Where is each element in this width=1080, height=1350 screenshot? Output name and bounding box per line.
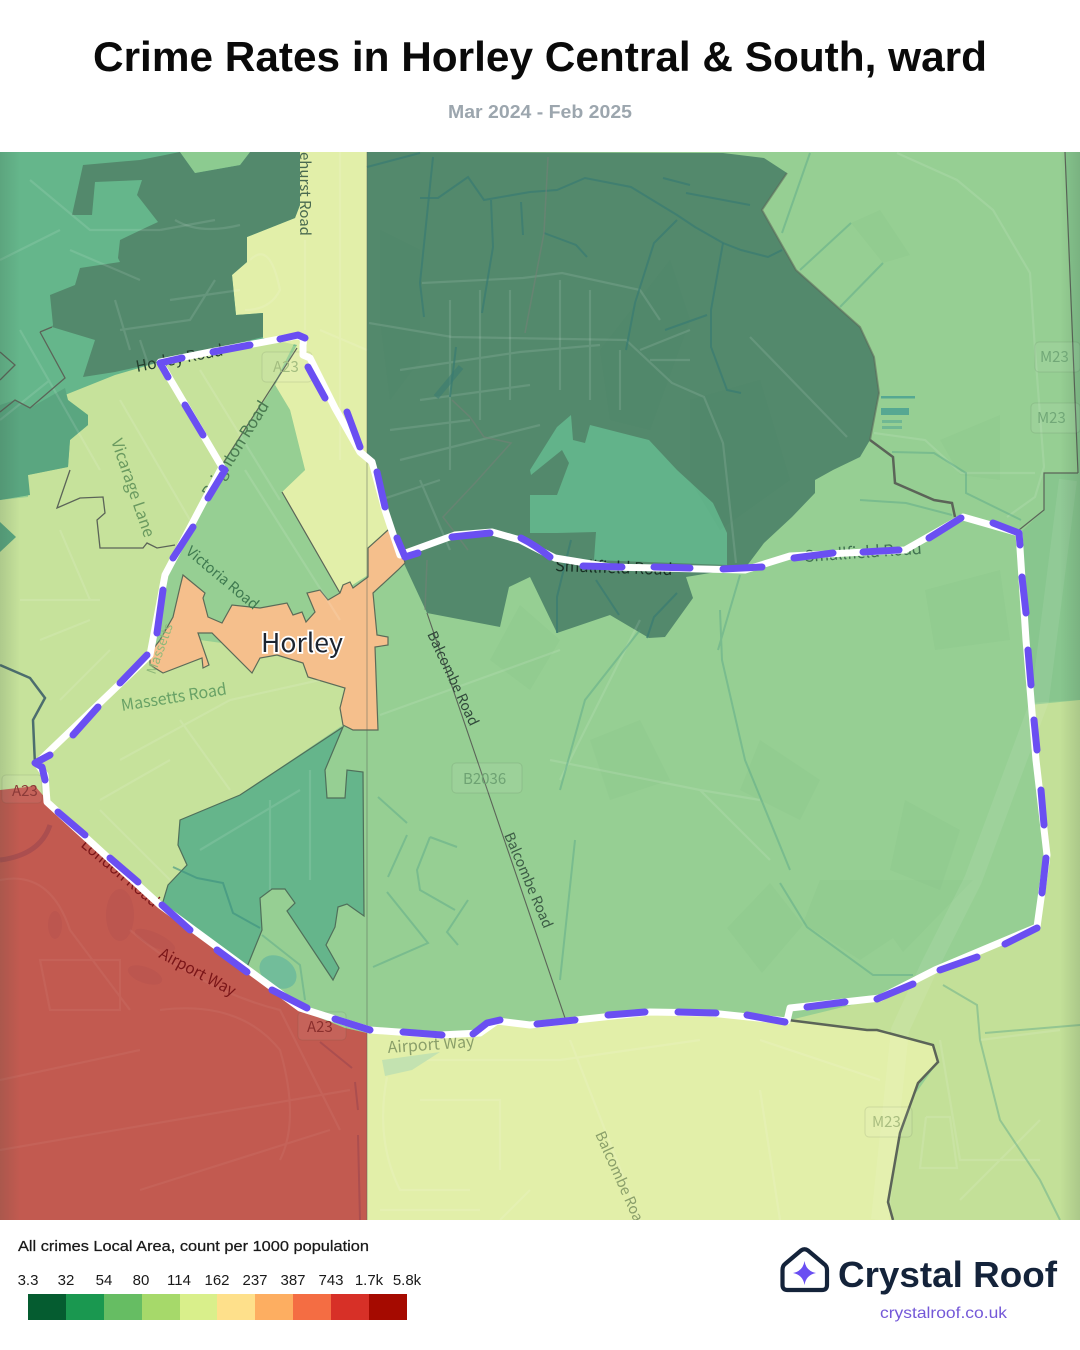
- legend tick labels: [18, 1272, 422, 1289]
- legend tick labels: 743: [318, 1272, 344, 1289]
- area: north yellow corridor: [232, 152, 400, 593]
- map edge shading right: [1067, 152, 1080, 1220]
- map labels: Airport Way: [156, 942, 240, 1001]
- place label: Horley: Horley: [261, 623, 343, 660]
- area: north-west dark green: [50, 152, 300, 377]
- map labels: M23: [1040, 346, 1069, 367]
- legend tick labels: 1.7k: [355, 1272, 384, 1289]
- airport roads: [0, 879, 350, 1190]
- area: Brighton Road mid green: [275, 385, 305, 492]
- website url: crystalroof.co.uk: [880, 1305, 1008, 1322]
- map labels: Brighton Road: [195, 395, 274, 502]
- legend tick labels: 162: [204, 1272, 230, 1289]
- stream in south central area: [173, 867, 260, 928]
- legend tick labels: 3.3: [18, 1272, 38, 1289]
- legend tick labels: 54: [96, 1272, 112, 1289]
- map labels: Massetts: [141, 620, 177, 676]
- streams in green areas: [373, 153, 1080, 1220]
- map labels: Smallfield Road: [804, 535, 922, 567]
- area: base mid green: [1, 152, 1080, 1094]
- area: Smallfield medium green island: [530, 415, 727, 565]
- title: Crime Rates in Horley Central & South, ward: [93, 33, 987, 80]
- field patches: [380, 210, 1010, 973]
- map labels: Victoria Road: [182, 541, 264, 614]
- pond: [260, 955, 296, 989]
- map labels: A23: [273, 356, 299, 377]
- area: top pocket green: [180, 152, 250, 173]
- airport dark shapes: [48, 889, 178, 989]
- map labels: M23: [1037, 407, 1066, 428]
- ward boundary: purple dashes: [35, 335, 1046, 1035]
- map labels: A23: [12, 780, 38, 801]
- area: Horley town centre orange: [150, 530, 405, 730]
- legend tick labels: 114: [167, 1272, 191, 1289]
- map labels: Horley Road: [134, 338, 225, 377]
- map labels: Balcombe Road: [499, 829, 558, 931]
- local area boundary lines: [0, 152, 1078, 1220]
- area: south-east light green: [790, 700, 1080, 1220]
- area: airport south yellow: [367, 1012, 938, 1220]
- wordmark: Crystal Roof: [838, 1254, 1058, 1295]
- legend tick labels: 80: [133, 1272, 149, 1289]
- logo: Crystal Roof: [782, 1249, 1058, 1322]
- legend tick labels: 32: [58, 1272, 74, 1289]
- map labels: Vicarage Lane: [106, 435, 163, 540]
- area: far-west darker green: [0, 388, 88, 500]
- icon: house with star: [782, 1249, 827, 1290]
- map labels: Massetts Road: [119, 676, 228, 716]
- airport lake: [382, 1052, 440, 1076]
- map edge shading left: [0, 152, 14, 1220]
- area: east strip green: [1020, 152, 1080, 703]
- faint road network: [0, 152, 1060, 1220]
- area: north-west medium green: [0, 152, 300, 500]
- area: south central medium green: [162, 727, 364, 980]
- rivers and streams in dark area: [367, 153, 782, 638]
- map labels: London Road: [77, 833, 165, 912]
- map labels: Smallfield Road: [555, 552, 673, 580]
- legend tick labels: 387: [280, 1272, 306, 1289]
- area: Gatwick airport red: [0, 786, 367, 1220]
- area: west light green: [0, 338, 345, 908]
- legend tick labels: 237: [242, 1272, 268, 1289]
- map labels: Airport Way: [387, 1028, 476, 1058]
- legend title: All crimes Local Area, count per 1000 population: [18, 1239, 369, 1255]
- legend colour scale: [28, 1294, 407, 1320]
- stream by pond: [262, 935, 305, 1000]
- map labels: [12, 152, 1069, 1233]
- area: north-east dark green: [367, 152, 879, 638]
- map labels: B2036: [463, 768, 506, 789]
- river Mole west: [0, 665, 45, 765]
- map labels: ehurst Road: [295, 152, 316, 236]
- map labels: A23: [307, 1016, 333, 1037]
- map labels: M23: [872, 1111, 901, 1132]
- legend tick labels: 5.8k: [393, 1272, 422, 1289]
- ward boundary: white underlay: [37, 336, 1047, 1035]
- grey footpath in dark area: [425, 157, 548, 610]
- motorway band: [1034, 479, 1072, 702]
- sewage works: [881, 396, 915, 429]
- legend: [18, 1239, 422, 1320]
- airport dark patches: [0, 825, 360, 1220]
- map labels: Balcombe Road: [590, 1127, 653, 1233]
- area: west edge dark pocket: [0, 522, 16, 552]
- road shields: [2, 342, 1080, 1137]
- map labels: Balcombe Road: [422, 628, 484, 729]
- subtitle: date range: Mar 2024 - Feb 2025: [448, 102, 632, 122]
